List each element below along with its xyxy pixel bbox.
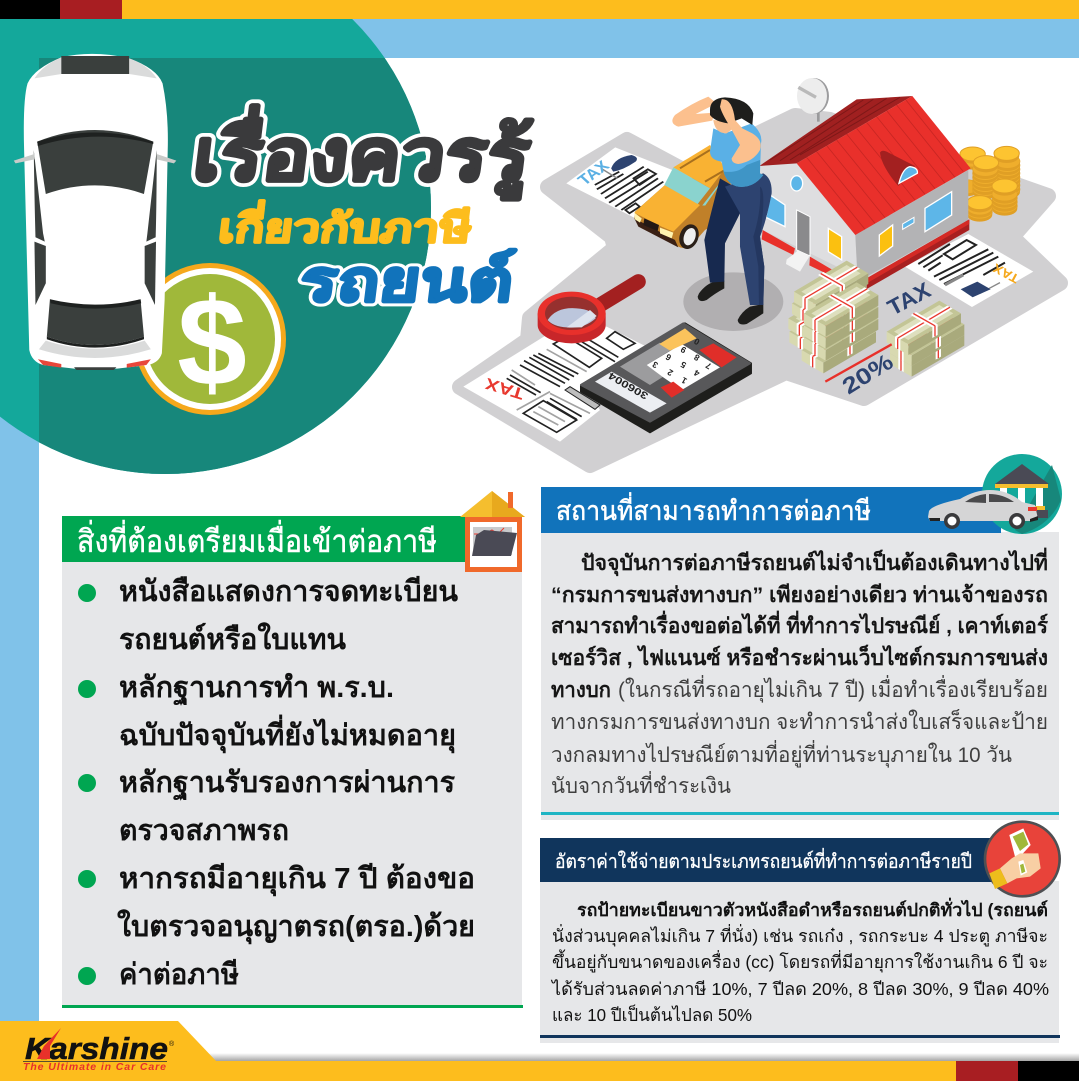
grey platform: [460, 116, 1060, 465]
bullet 1: รถยนต์หรือใบแทน: [119, 622, 346, 656]
body paragraph: [551, 547, 1048, 798]
calculator: 0: [692, 336, 701, 347]
woman holding her head: [672, 97, 783, 331]
bullet 1: [78, 576, 458, 656]
panel body: [541, 532, 1059, 820]
body paragraph: ขึ้นอยู่กับขนาดของเครื่อง (cc) โดยรถที่มีอายุการใช้งานเกิน 6 ปี จะ: [552, 949, 1048, 973]
tax label: TAX: [883, 277, 935, 320]
body paragraph: ปัจจุบันการต่อภาษีรถยนต์ไม่จำเป็นต้องเดินทางไปที่: [581, 547, 1048, 577]
bullet 4: หากรถมีอายุเกิน 7 ปี ต้องขอ: [119, 863, 475, 896]
bullet 2: ฉบับปัจจุบันที่ยังไม่หมดอายุ: [119, 714, 456, 753]
bullet 4: ใบตรวจอนุญาตรถ(ตรอ.)ด้วย: [117, 909, 475, 944]
calculator: 8: [692, 352, 701, 363]
document: top left tax form: TAX: [574, 158, 613, 189]
icon: hand holding money: [985, 822, 1060, 896]
panel heading: [541, 487, 1001, 533]
title line 3: รถยนต์: [296, 248, 517, 314]
bullet 1: หนังสือแสดงการจดทะเบียน: [119, 576, 458, 608]
title: [188, 104, 536, 314]
body paragraph: เซอร์วิส , ไฟแนนซ์ หรือชำระผ่านเว็บไซต์กรมการขนส่ง: [551, 643, 1048, 670]
top colour bar: [0, 0, 1079, 19]
bullet 5: ค่าต่อภาษี: [119, 959, 239, 991]
bullet 3: ตรวจสภาพรถ: [119, 815, 289, 847]
panel: documents to prepare: [62, 491, 525, 1008]
calculator: 306004: [606, 369, 650, 401]
icon: car and bank: [928, 454, 1062, 534]
body paragraph: “กรมการขนส่งทางบก” เพียงอย่างเดียว ท่านเจ้าของรถ: [551, 583, 1048, 607]
logo: Karshine: The Ultimate in Car Care: [23, 1061, 166, 1073]
calculator: 4: [692, 368, 701, 379]
body paragraph: สามารถทำเรื่องขอต่อได้ที่ ที่ทำการไปรษณีย์ , เคาท์เตอร์: [551, 610, 1048, 638]
body paragraph: นับจากวันที่ชำระเงิน: [551, 771, 731, 798]
body paragraph: นั่งส่วนบุคคลไม่เกิน 7 ที่นั่ง) เช่น รถเก๋ง , รถกระบะ 4 ประตู ภาษีจะ: [552, 924, 1048, 947]
panel heading: [540, 838, 1000, 882]
teal header circle: [0, 19, 460, 489]
title line 2: เกี่ยวกับภาษี: [216, 199, 475, 251]
yellow car: [634, 145, 742, 252]
body paragraph: ทางบก: [551, 678, 611, 702]
title line 1: เรื่องควรรู้: [188, 104, 536, 201]
document: top left tax form: [566, 147, 676, 218]
panel: annual tax rates: [540, 822, 1060, 1043]
calculator: 5: [679, 359, 688, 370]
panel heading: สถานที่สามารถทำการต่อภาษี: [556, 492, 871, 526]
panel body: [540, 881, 1059, 1043]
calculator: 6: [664, 352, 673, 363]
calculator: 1: [679, 375, 689, 386]
house: [759, 96, 971, 289]
body paragraph: (ในกรณีที่รถอายุไม่เกิน 7 ปี) เมื่อทำเรื่องเรียบร้อย: [618, 675, 1048, 703]
body paragraph: ทางกรมการขนส่งทางบก จะทำการนำส่งใบเสร็จและป้าย: [551, 707, 1048, 734]
panel: where to renew tax: [541, 454, 1062, 820]
bullet 3: [78, 767, 455, 847]
calculator: 2: [665, 367, 675, 378]
title line 3: รถยนต์: [296, 248, 517, 314]
bullet 4: [78, 863, 475, 944]
body paragraph: รถป้ายทะเบียนขาวตัวหนังสือดำหรือรถยนต์ปกติทั่วไป (รถยนต์: [577, 897, 1048, 920]
title line 1: เรื่องควรรู้: [188, 104, 536, 201]
back money stack: [788, 261, 868, 355]
panel body: [62, 561, 522, 1008]
gold coin stacks: [954, 146, 1020, 222]
body paragraph: วงกลมทางไปรษณีย์ตามที่อยู่ที่ท่านระบุภายใน 10 วัน: [551, 740, 1012, 768]
calculator: 3: [650, 359, 660, 370]
icon: dollar coin: $: [177, 273, 247, 412]
body paragraph: และ 10 ปีเป็นต้นไปลด 50%: [552, 1004, 752, 1025]
icon: white car top view: [14, 54, 176, 370]
panel heading: อัตราค่าใช้จ่ายตามประเภทรถยนต์ที่ทำการต่อภาษีรายปี: [555, 848, 972, 873]
bullet list: [78, 576, 475, 991]
isometric tax illustration: [460, 78, 1060, 465]
logo: Karshine: [23, 1028, 175, 1073]
body paragraph: [550, 897, 1049, 1025]
document: right tax form: TAX: [990, 260, 1021, 286]
bottom colour bar: [0, 1021, 1079, 1081]
logo: Karshine: Karshine: [25, 1031, 168, 1066]
icon: dollar coin: [134, 263, 286, 415]
bullet 2: [78, 672, 456, 753]
front money stack: [802, 282, 878, 373]
body paragraph: ได้รับส่วนลดค่าภาษี 10%, 7 ปีลด 20%, 8 ปีลด 30%, 9 ปีลด 40%: [550, 979, 1049, 999]
document: bottom left tax form: [463, 327, 650, 442]
document: right tax form: [905, 234, 1033, 307]
bullet 2: หลักฐานการทำ พ.ร.บ.: [119, 672, 394, 706]
satellite dish: [797, 78, 829, 122]
bullet 3: หลักฐานรับรองการผ่านการ: [119, 767, 455, 801]
money stacks: [788, 261, 964, 399]
panel heading: สิ่งที่ต้องเตรียมเมื่อเข้าต่อภาษี: [77, 520, 437, 559]
calculator: [581, 323, 751, 432]
magnifying glass: [538, 282, 638, 343]
icon: house with folder: [460, 491, 525, 572]
calculator: 9: [679, 344, 688, 355]
calculator: 7: [704, 360, 713, 371]
document: bottom left tax form: TAX: [483, 374, 526, 402]
logo: Karshine: ®: [169, 1040, 175, 1048]
right money stack: [887, 301, 964, 377]
20 percent label: 20%: [837, 348, 898, 399]
